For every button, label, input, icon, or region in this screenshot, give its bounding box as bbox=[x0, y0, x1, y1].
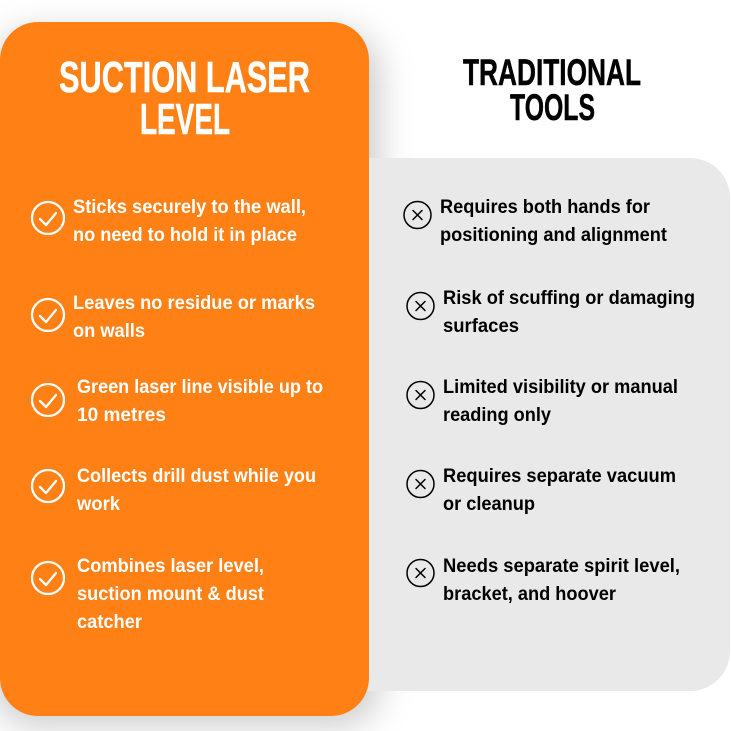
panel: traditional tools bbox=[300, 52, 730, 691]
item: separate tools bbox=[407, 556, 680, 605]
item: no residue: on walls bbox=[73, 321, 145, 342]
item: combines: catcher bbox=[77, 612, 143, 633]
heading: suction laser level: SUCTION LASER bbox=[59, 53, 310, 102]
item: no residue: Leaves no residue or marks bbox=[73, 293, 315, 314]
item: visibility: reading only bbox=[443, 405, 551, 426]
item: scuffing: Risk of scuffing or damaging bbox=[443, 288, 695, 309]
item: drill dust: work bbox=[76, 494, 120, 515]
item: drill dust bbox=[32, 466, 316, 515]
item: sticks securely: Sticks securely to the wall, bbox=[73, 197, 306, 218]
item: combines: Combines laser level, bbox=[77, 556, 264, 577]
heading: traditional tools bbox=[463, 52, 641, 128]
heading: traditional tools: TOOLS bbox=[510, 87, 595, 128]
item: green laser bbox=[32, 377, 323, 426]
panel shadow bbox=[0, 32, 379, 726]
item: vacuum: Requires separate vacuum bbox=[443, 466, 676, 487]
item: drill dust: Collects drill dust while you bbox=[77, 466, 316, 487]
item: no residue bbox=[32, 293, 315, 342]
item: scuffing bbox=[407, 288, 695, 337]
item: both hands: positioning and alignment bbox=[440, 225, 668, 246]
item: separate tools: bracket, and hoover bbox=[443, 584, 617, 605]
panel: suction laser level bbox=[0, 22, 369, 716]
item: separate tools: Needs separate spirit level, bbox=[443, 556, 680, 577]
heading: suction laser level bbox=[59, 53, 310, 144]
item: vacuum: or cleanup bbox=[443, 494, 535, 515]
item: both hands: Requires both hands for bbox=[440, 197, 651, 218]
item: scuffing: surfaces bbox=[443, 316, 519, 337]
item: combines: suction mount & dust bbox=[77, 584, 265, 605]
item: sticks securely: no need to hold it in place bbox=[73, 225, 297, 246]
item: visibility: Limited visibility or manual bbox=[443, 377, 678, 398]
item: green laser: Green laser line visible up to bbox=[77, 377, 323, 398]
item: combines bbox=[32, 556, 265, 633]
heading: suction laser level: LEVEL bbox=[140, 95, 230, 144]
item: green laser: 10 metres bbox=[77, 405, 166, 426]
heading: traditional tools: TRADITIONAL bbox=[463, 52, 641, 93]
item: sticks securely bbox=[32, 197, 306, 246]
item: both hands bbox=[404, 197, 668, 246]
item: vacuum bbox=[407, 466, 676, 515]
item: visibility bbox=[407, 377, 678, 426]
